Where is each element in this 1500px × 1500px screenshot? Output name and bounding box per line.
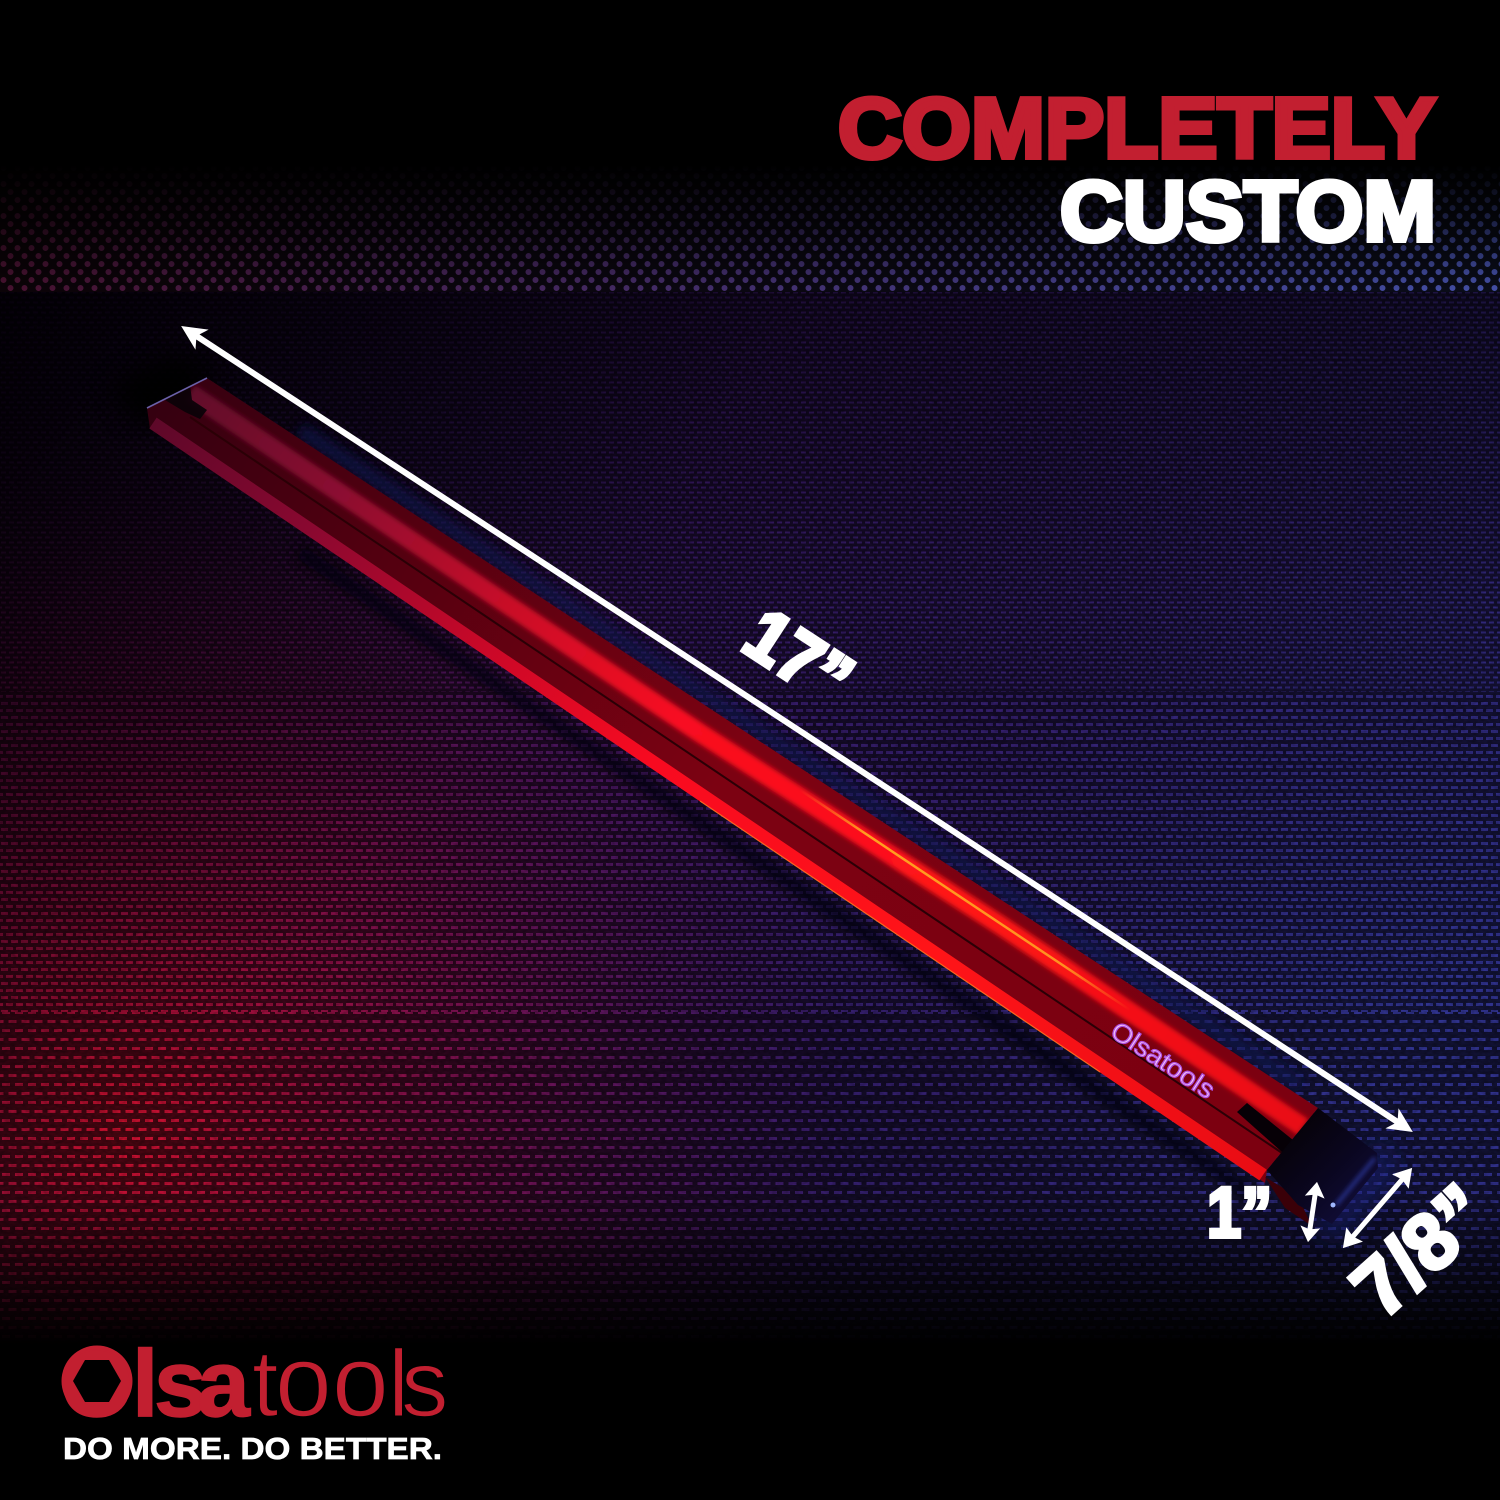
arrow: 1 inch height bbox=[1298, 1180, 1327, 1244]
title line: custom: CUSTOM bbox=[1060, 164, 1436, 260]
background: carbon fibre band bbox=[0, 150, 1500, 292]
title line: completely: COMPLETELY bbox=[838, 82, 1436, 176]
logo wordmark: ls bbox=[388, 1331, 448, 1437]
arrow: 17 inch length bbox=[175, 316, 1419, 1142]
magnetic bar: red aluminium body bbox=[147, 378, 1318, 1183]
logo: hex hole bbox=[73, 1360, 121, 1402]
logo wordmark: t bbox=[252, 1331, 278, 1437]
groove line bbox=[190, 417, 1285, 1155]
bar right end cap bbox=[1265, 1108, 1378, 1226]
bar logo: Olsatools bbox=[1105, 1015, 1221, 1105]
brand logo and tagline bbox=[60, 1324, 448, 1466]
logo wordmark: Olsa bbox=[60, 1331, 251, 1437]
arrow: 7/8 inch width bbox=[1335, 1161, 1420, 1255]
title: completely custom bbox=[838, 82, 1436, 260]
hairline reflections bbox=[700, 790, 1130, 1072]
logo wordmark: oo bbox=[275, 1324, 389, 1438]
tagline: DO MORE. DO BETTER. bbox=[63, 1431, 442, 1466]
label: 17 inch: 17” bbox=[730, 592, 868, 722]
label: 1 inch: 1” bbox=[1207, 1174, 1272, 1253]
left end edge bbox=[147, 378, 207, 408]
lower highlight stripe bbox=[153, 423, 1263, 1175]
left mounting slot bbox=[165, 385, 207, 419]
bar shadow and blue edge glow bbox=[110, 355, 1400, 1240]
logo: hex O mark backing bbox=[62, 1346, 132, 1416]
right mounting slot bbox=[1237, 1103, 1293, 1152]
upper highlight stripe bbox=[190, 393, 1303, 1127]
